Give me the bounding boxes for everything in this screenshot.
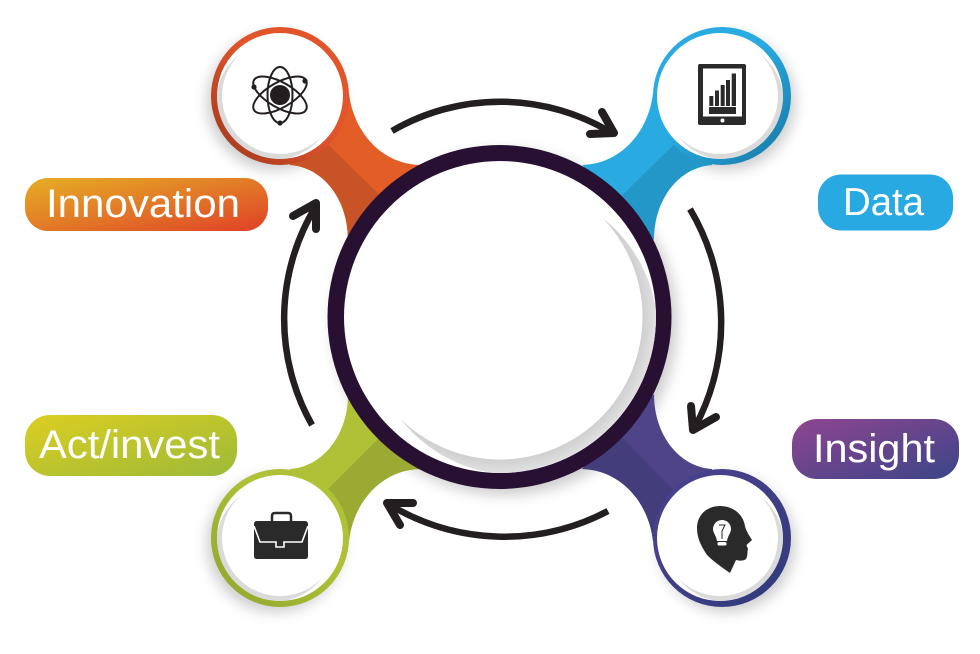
label: Act/invest: Act/invest [39, 423, 220, 467]
icon: atom [248, 67, 312, 126]
icon: head with lightbulb [697, 506, 752, 573]
icon: tablet with bar chart [698, 64, 746, 125]
icon: briefcase [254, 513, 308, 559]
central circle [328, 145, 672, 489]
connector arm: orange [290, 93, 420, 236]
label: Data: Data [843, 181, 924, 224]
label: Innovation [25, 178, 268, 231]
connector arm: green [290, 398, 420, 541]
node: Act/invest circle [211, 469, 349, 607]
node: Innovation circle [211, 27, 349, 165]
arrow: Innovation to Data [392, 102, 614, 134]
connector arm: blue [582, 93, 712, 240]
arrow: Insight to Act/invest [387, 503, 608, 537]
node: Data circle [653, 27, 791, 165]
arrow: Act/invest to Innovation [284, 203, 316, 425]
node: Insight circle [653, 469, 791, 607]
label: Act/invest [25, 415, 237, 476]
label: Insight [792, 419, 959, 479]
label: Insight: Insight [813, 427, 935, 471]
label: Data [818, 174, 953, 230]
connector arm: purple [582, 394, 712, 541]
arrow: Data to Insight [690, 209, 721, 430]
label: Innovation: Innovation [46, 182, 240, 226]
